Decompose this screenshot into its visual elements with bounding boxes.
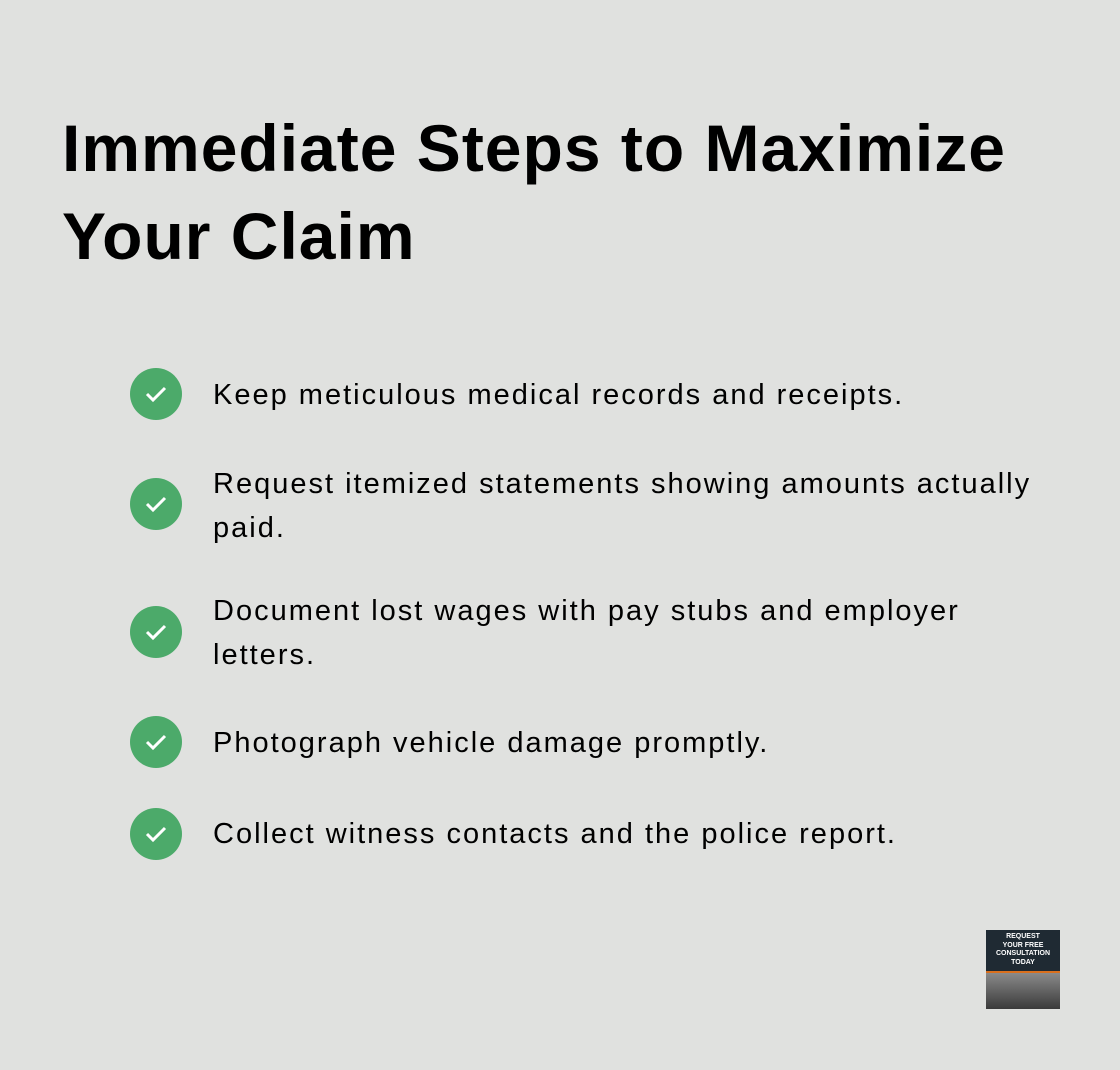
icon: check [130, 478, 182, 530]
item 1 [130, 368, 904, 420]
item 5 [130, 808, 897, 860]
logo: consultation badge: YOUR FREE [1003, 942, 1043, 948]
text 5: Collect witness contacts and the police report. [213, 818, 897, 850]
icon: check [130, 606, 182, 658]
icon: check [130, 368, 182, 420]
item 2 [130, 468, 1031, 544]
logo: consultation badge: CONSULTATION [996, 950, 1050, 957]
text 3: Document lost wages with pay stubs and employer letters. [213, 595, 960, 671]
logo: consultation badge: REQUEST [1006, 933, 1040, 940]
logo: consultation badge: TODAY [1011, 958, 1035, 966]
icon: check [130, 716, 182, 768]
text 1: Keep meticulous medical records and receipts. [213, 379, 904, 411]
icon: check [130, 808, 182, 860]
logo: consultation badge [986, 930, 1060, 1009]
item 3 [130, 595, 960, 671]
title: Immediate Steps to Maximize Your Claim [62, 111, 1006, 273]
text 4: Photograph vehicle damage promptly. [213, 727, 769, 759]
item 4 [130, 716, 769, 768]
text 2: Request itemized statements showing amounts actually paid. [213, 468, 1031, 544]
